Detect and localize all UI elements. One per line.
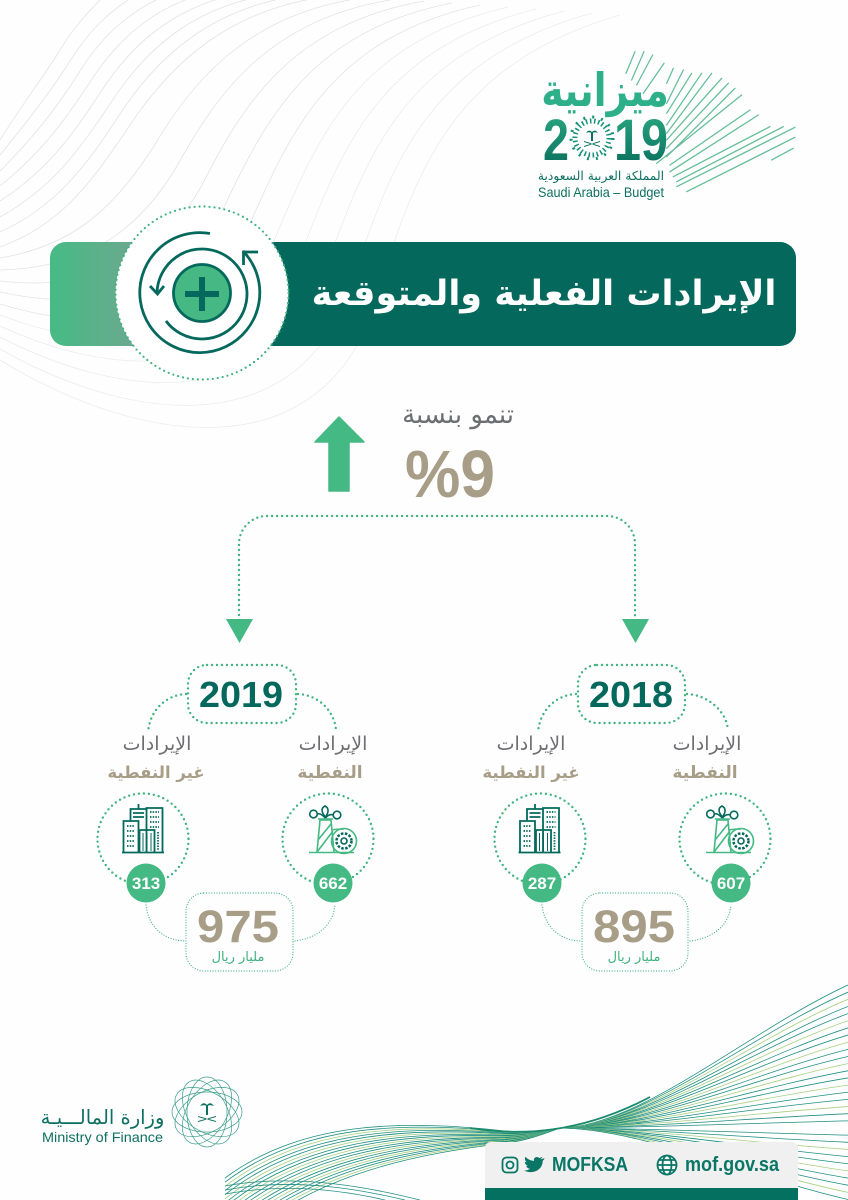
panel: 2018 bbox=[482, 665, 770, 971]
split dotted connector with arrowheads bbox=[226, 516, 649, 643]
year badge 2019: 2019 bbox=[199, 674, 283, 715]
non-oil label bbox=[482, 733, 580, 783]
banner light end bbox=[50, 242, 140, 346]
total 975 bbox=[186, 893, 293, 971]
right arrowhead bbox=[622, 619, 649, 643]
badge 313 bbox=[126, 864, 166, 902]
growth value: %9 bbox=[405, 437, 495, 512]
badge 287: 287 bbox=[528, 874, 556, 893]
year connectors bbox=[538, 694, 728, 732]
banner title text: الإيرادات الفعلية والمتوقعة bbox=[312, 274, 776, 314]
contact panel background bbox=[485, 1142, 798, 1188]
icon: buildings bbox=[122, 804, 164, 852]
total 895 bbox=[582, 893, 688, 971]
oil dotted ring bbox=[282, 794, 374, 884]
total 975: مليار ريال bbox=[212, 950, 264, 965]
badge 662: 662 bbox=[319, 874, 347, 893]
thin connectors to total bbox=[146, 905, 335, 941]
icon: up arrow bbox=[315, 417, 364, 491]
icon: oil tower and gear bbox=[706, 806, 754, 854]
ministry emblem bbox=[167, 1072, 247, 1152]
icon: oil tower and gear bbox=[309, 806, 356, 854]
badge 607 bbox=[712, 864, 750, 902]
panel: 2019 bbox=[98, 665, 374, 971]
icon: globe bbox=[658, 1156, 676, 1174]
banner dark body bbox=[260, 242, 796, 346]
non-oil label: الإيرادات bbox=[123, 733, 191, 755]
background: dark strand where the bands meet bbox=[470, 1097, 650, 1132]
total 975: 975 bbox=[197, 901, 279, 952]
icon: buildings bbox=[518, 804, 560, 852]
oil label bbox=[297, 733, 367, 783]
non-oil dotted ring bbox=[494, 794, 586, 884]
non-oil dotted ring bbox=[98, 794, 188, 884]
oil label bbox=[672, 733, 741, 783]
icon: rotating arrows with plus bbox=[140, 233, 260, 353]
thin connectors to total bbox=[542, 905, 731, 941]
year badge 2019 bbox=[188, 665, 296, 723]
ministry arabic name: وزارة المالـــيـة bbox=[41, 1106, 164, 1129]
total 895: 895 bbox=[593, 901, 675, 952]
non-oil label bbox=[107, 733, 205, 783]
ministry of finance logo bbox=[41, 1072, 247, 1152]
year connectors bbox=[148, 694, 336, 732]
total 895: مليار ريال bbox=[608, 950, 660, 965]
logo word: budget: ميزانية bbox=[541, 63, 669, 118]
background: grey wave lines bbox=[0, 0, 620, 428]
icon: twitter bbox=[524, 1157, 545, 1172]
year badge 2018: 2018 bbox=[589, 674, 673, 715]
non-oil label: الإيرادات bbox=[497, 733, 565, 755]
logo english subtitle: Saudi Arabia – Budget bbox=[538, 184, 664, 200]
oil dotted ring bbox=[680, 794, 770, 884]
logo map lines bbox=[626, 52, 795, 192]
logo arabic subtitle: المملكة العربية السعودية bbox=[538, 169, 664, 184]
title banner bbox=[50, 206, 796, 380]
oil label: الإيرادات bbox=[673, 733, 741, 755]
growth label: تنمو بنسبة bbox=[402, 400, 514, 430]
logo emblem bbox=[571, 117, 613, 159]
contact panel bottom bar bbox=[485, 1188, 798, 1200]
website: mof.gov.sa bbox=[685, 1154, 780, 1176]
left arrowhead bbox=[226, 619, 253, 643]
oil label: النفطية bbox=[297, 763, 363, 783]
non-oil label: غير النفطية bbox=[482, 763, 580, 783]
badge 287 bbox=[522, 864, 562, 902]
logo digits 19: 19 bbox=[614, 108, 668, 173]
logo digit 2: 2 bbox=[543, 108, 569, 173]
icon medallion bbox=[116, 206, 288, 380]
badge 662 bbox=[314, 864, 352, 902]
badge 607: 607 bbox=[717, 874, 745, 893]
year badge 2018 bbox=[578, 665, 685, 723]
badge 313: 313 bbox=[132, 874, 160, 893]
ministry english name: Ministry of Finance bbox=[42, 1129, 163, 1145]
background: green wave band rising to the right bbox=[560, 985, 848, 1200]
icon: instagram bbox=[502, 1158, 518, 1172]
contact panel bbox=[485, 1142, 798, 1200]
background: green wave band on the left bbox=[225, 1125, 560, 1200]
oil label: النفطية bbox=[672, 763, 738, 783]
non-oil label: غير النفطية bbox=[107, 763, 205, 783]
oil label: الإيرادات bbox=[299, 733, 367, 755]
logo: budget 2019 bbox=[538, 52, 795, 200]
contact handle: MOFKSA bbox=[552, 1154, 628, 1176]
